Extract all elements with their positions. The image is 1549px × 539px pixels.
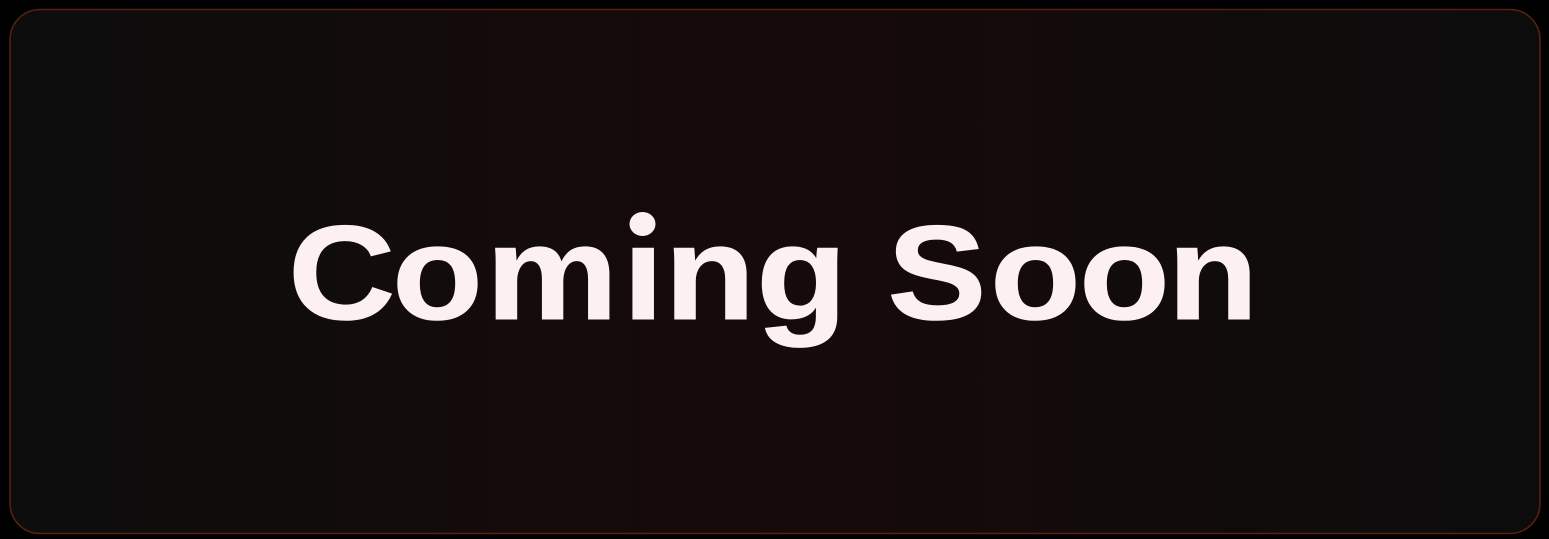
icon: round dot of the letter i [630,212,656,236]
title: Coming Soon: Coming Soon [288,198,1258,347]
